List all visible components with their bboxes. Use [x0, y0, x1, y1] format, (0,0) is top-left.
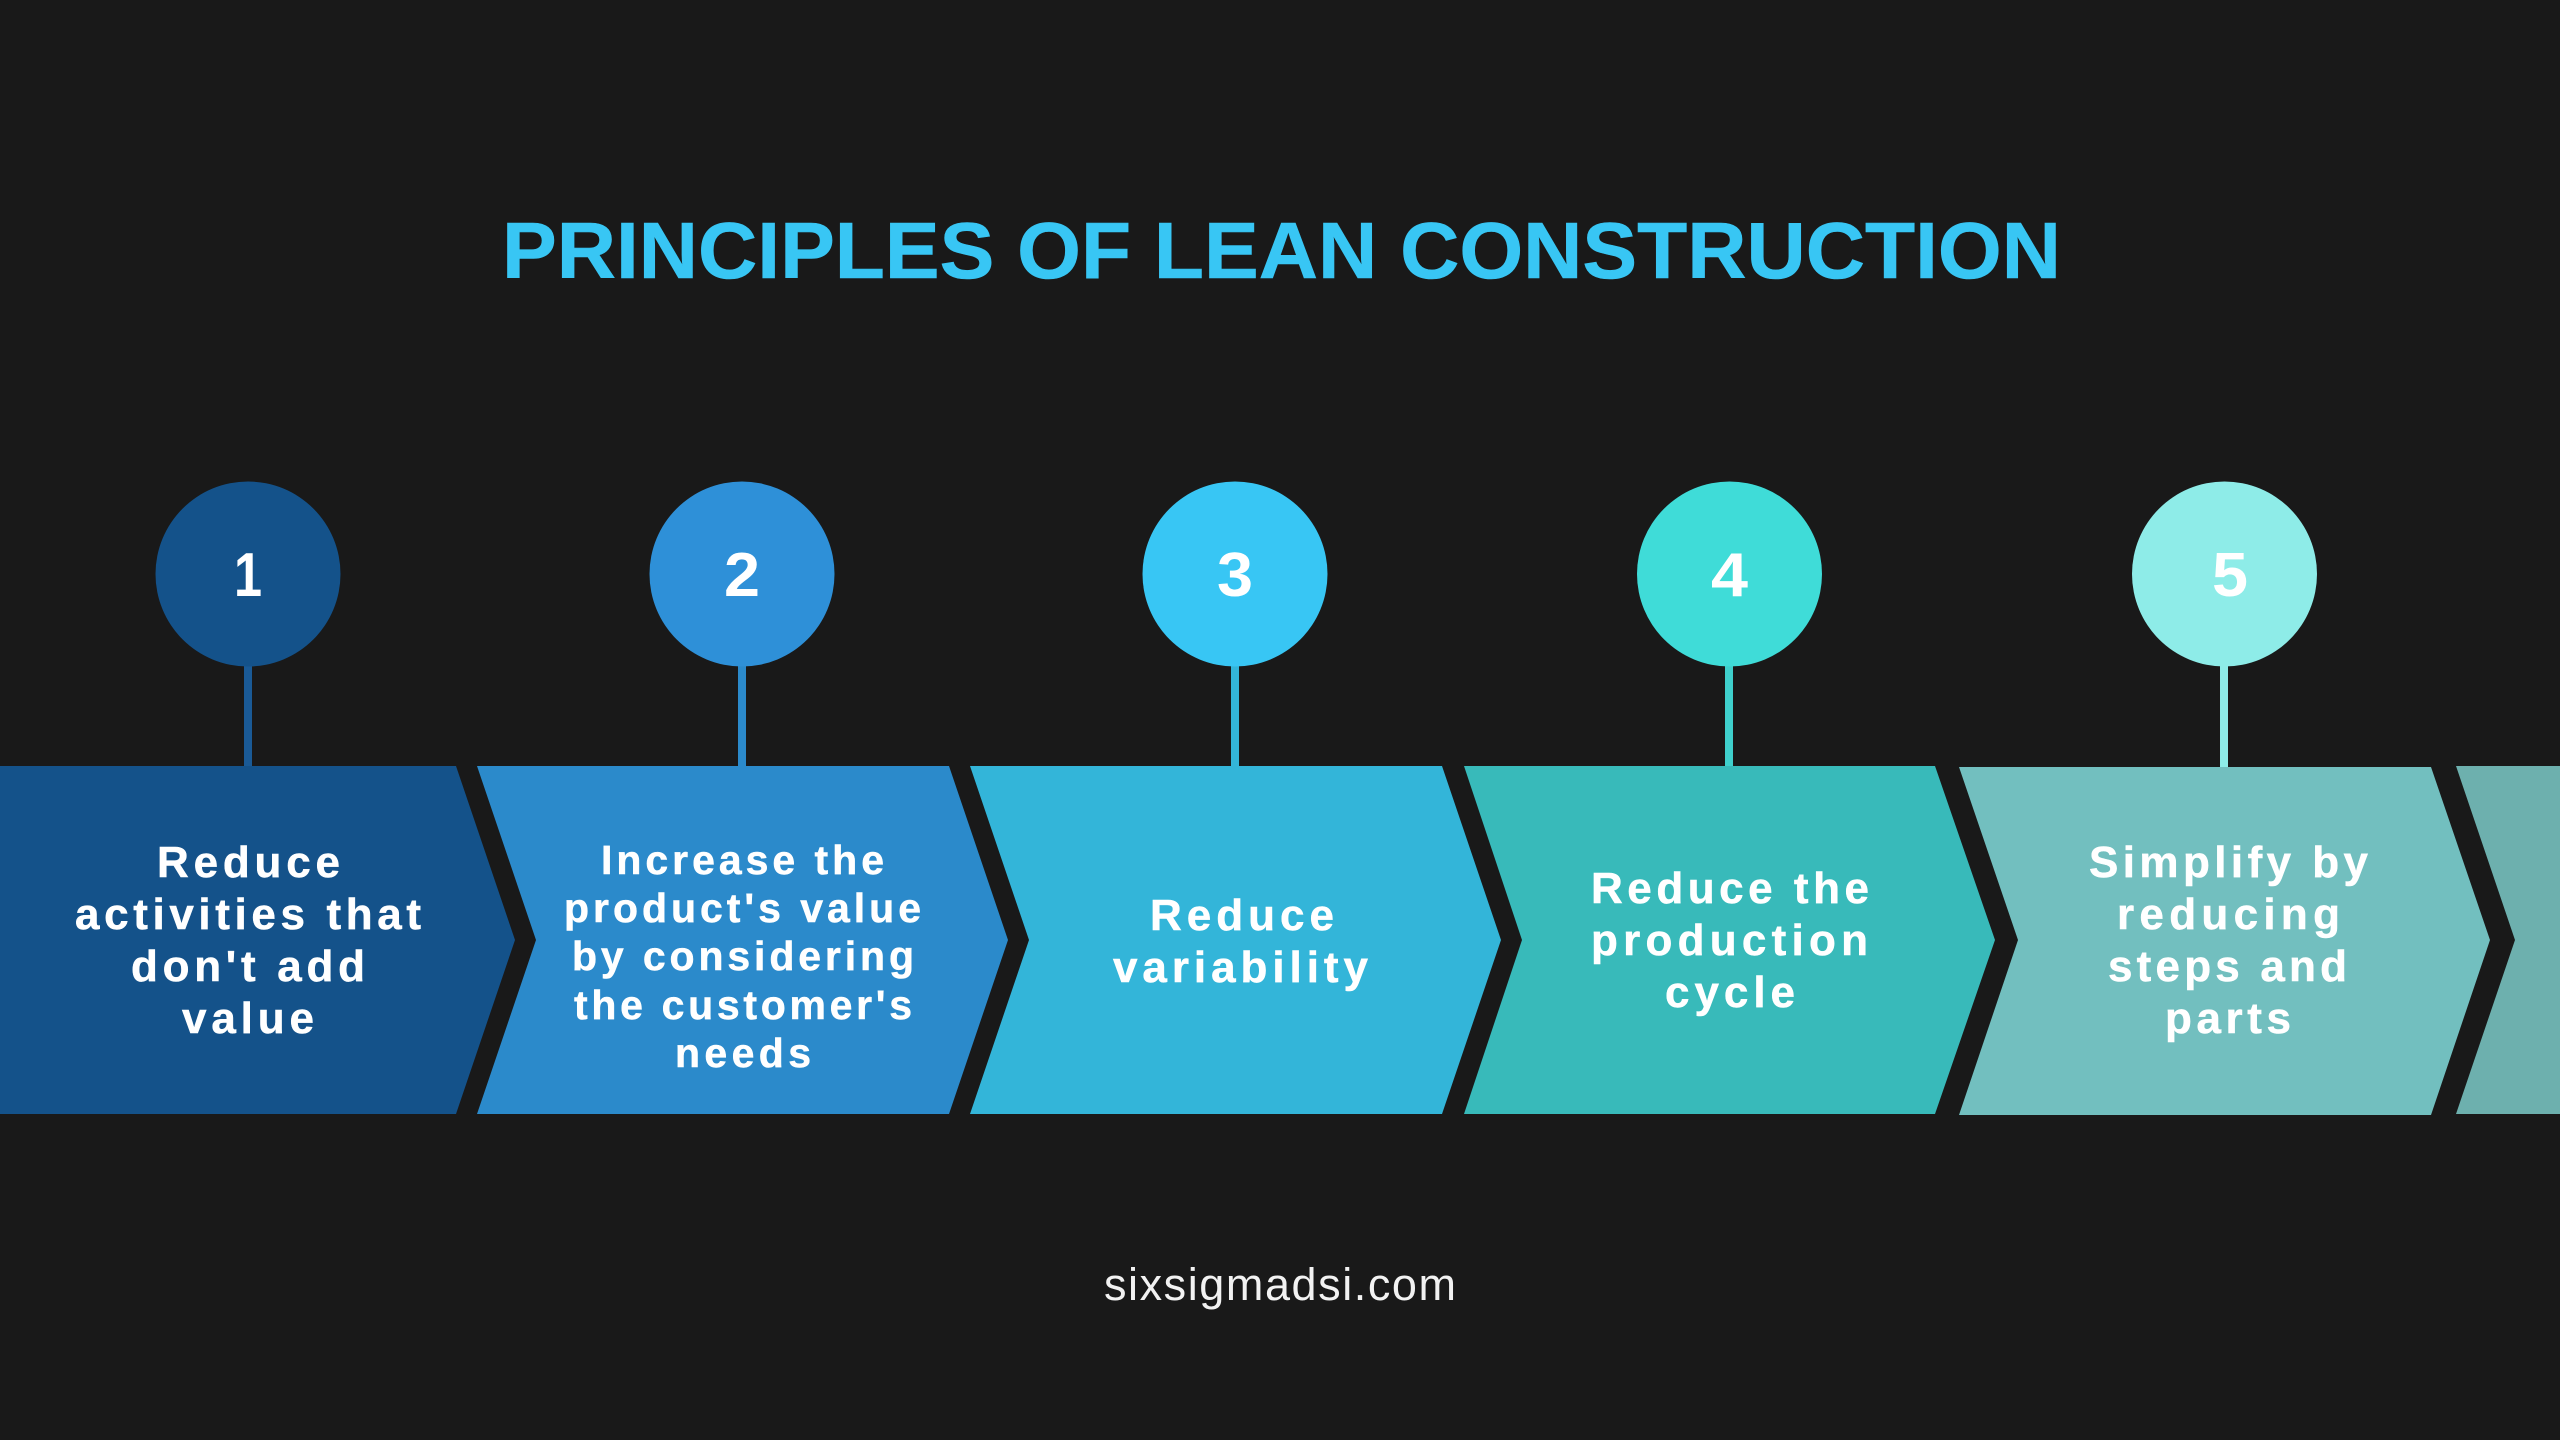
title: PRINCIPLES OF LEAN CONSTRUCTION — [502, 206, 2061, 295]
step 4 text: cycle — [1665, 968, 1795, 1017]
step 3 number circle — [1142, 482, 1328, 666]
footer website: sixsigmadsi.com — [1104, 1259, 1456, 1310]
step 3 connector — [1231, 660, 1239, 768]
step 2 chevron — [477, 766, 1008, 1114]
step 1 — [0, 482, 515, 1114]
step 5 text: reducing — [2117, 890, 2340, 939]
step 5 text: parts — [2165, 994, 2291, 1043]
step 2 number circle — [650, 482, 834, 666]
step 4 text — [1591, 864, 1869, 1017]
step 1 text: Reduce — [157, 838, 340, 887]
step 2 connector — [738, 660, 746, 768]
step 5 number circle: 5 — [2212, 541, 2248, 610]
step 3 text — [1113, 891, 1369, 992]
step 5 text: Simplify by — [2089, 838, 2369, 887]
step 2 text: the customer's — [574, 982, 912, 1028]
step 2 text: needs — [675, 1030, 811, 1076]
step 1 number circle: 1 — [234, 541, 262, 610]
step 1 text: activities that — [75, 890, 421, 939]
step 4 chevron — [1464, 766, 1995, 1114]
partial next chevron — [2456, 766, 2560, 1114]
step 1 chevron — [0, 766, 515, 1114]
step 5 number circle — [2132, 482, 2317, 666]
step 5 text: steps and — [2108, 942, 2347, 991]
step 3 — [970, 482, 1501, 1114]
step 4 connector — [1725, 660, 1733, 768]
step 5 chevron — [1959, 767, 2490, 1115]
step 2 text: by considering — [572, 933, 914, 979]
step 3 chevron — [970, 766, 1501, 1114]
step 2 text — [564, 837, 921, 1076]
step 4 text: production — [1591, 916, 1868, 965]
step 3 text: Reduce — [1150, 891, 1334, 940]
step 1 text — [75, 838, 421, 1043]
step 4 number circle — [1637, 482, 1822, 666]
step 2 number circle: 2 — [724, 541, 760, 610]
step 5 text — [2089, 838, 2369, 1043]
step 2 text: product's value — [564, 885, 921, 931]
step 4 text: Reduce the — [1591, 864, 1869, 913]
step 4 — [1464, 482, 1995, 1114]
step 3 number circle: 3 — [1217, 541, 1253, 610]
step 1 connector — [244, 660, 252, 768]
step 4 number circle: 4 — [1711, 541, 1749, 610]
step 1 text: don't add — [131, 942, 365, 991]
step 2 — [477, 482, 1008, 1114]
step 1 text: value — [182, 994, 314, 1043]
step 1 number circle — [156, 482, 340, 666]
step 2 text: Increase the — [601, 837, 884, 883]
step 5 connector — [2220, 660, 2228, 770]
step 5 — [1959, 482, 2490, 1115]
step 3 text: variability — [1113, 943, 1369, 992]
